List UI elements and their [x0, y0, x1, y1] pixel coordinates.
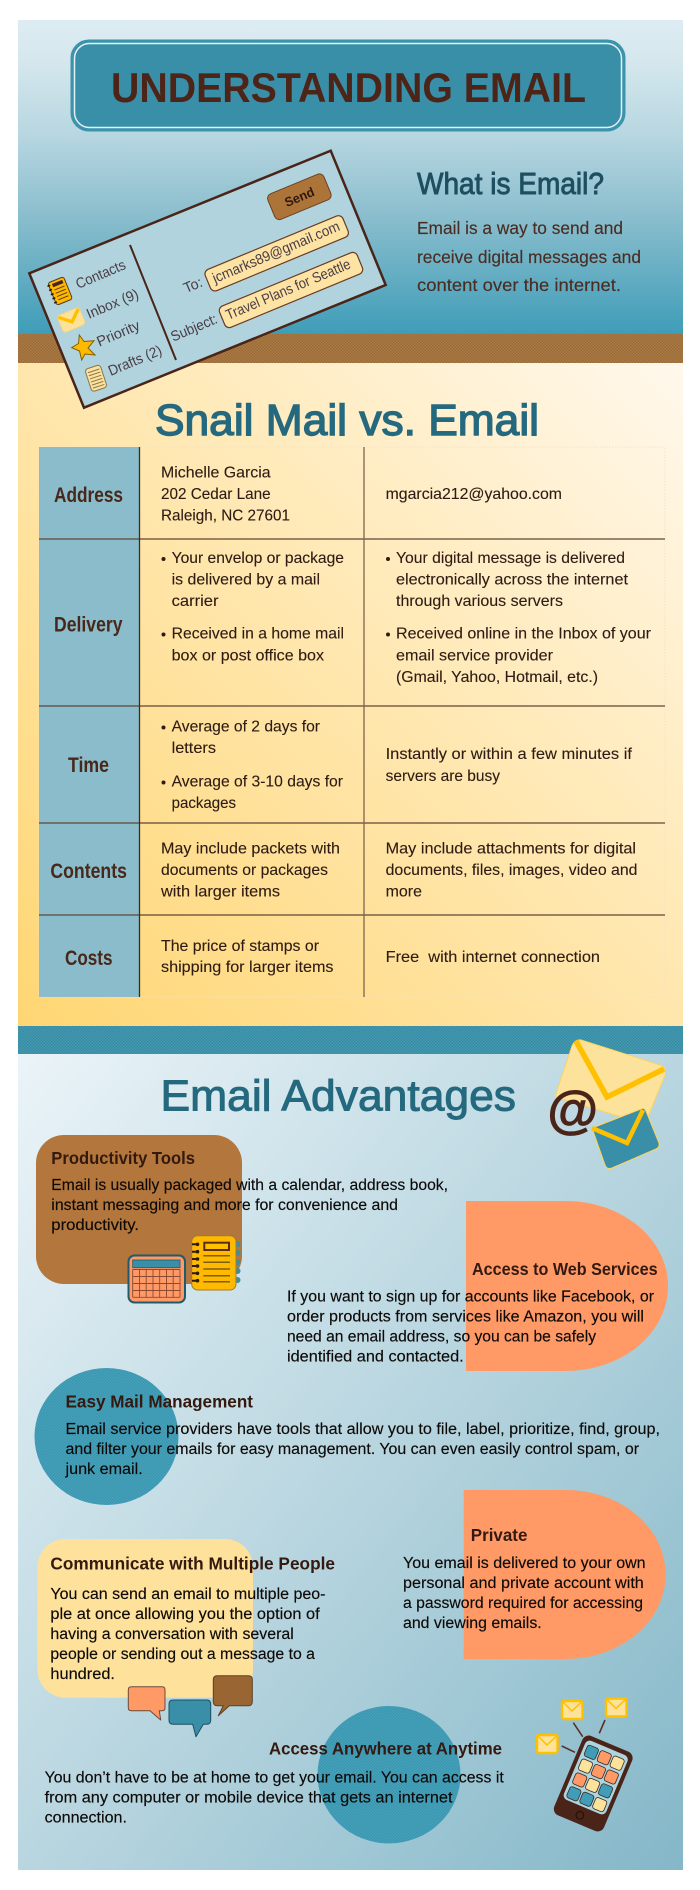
private block [403, 1490, 666, 1659]
communicate text: hundred. [50, 1666, 115, 1683]
row: address: Address [54, 484, 123, 507]
mail management text [64, 1421, 660, 1478]
comparison table [39, 447, 665, 997]
private text: personal and private account with [403, 1575, 644, 1592]
title banner [72, 41, 624, 130]
row: time [68, 719, 633, 812]
icon: notebook [192, 1236, 240, 1290]
row: costs: Costs [65, 947, 112, 970]
sidebar labels: Contacts [74, 257, 128, 293]
access to web services block [287, 1201, 668, 1371]
row: address: 202 Cedar Lane [161, 486, 271, 503]
panel: header background [18, 20, 683, 334]
panel: snail mail section background [18, 363, 683, 1026]
row: time: Time [68, 754, 109, 777]
access anywhere block [45, 1706, 504, 1843]
row: time: Instantly or within a few minutes if [386, 746, 633, 763]
teal textured band [18, 1026, 683, 1054]
row: delivery: email service provider [396, 648, 554, 664]
row: contents: documents or packages [161, 862, 328, 879]
send button [266, 172, 333, 221]
row: delivery: Received in a home mail [172, 626, 344, 643]
communicate heading: Communicate with Multiple People [50, 1554, 335, 1574]
web services heading: Access to Web Services [472, 1259, 658, 1279]
icon: speech bubbles [128, 1676, 252, 1737]
icon: calendar [128, 1256, 185, 1302]
communicate text: having a conversation with several [50, 1626, 294, 1643]
row: delivery: Your envelop or package [172, 550, 344, 567]
row: delivery: is delivered by a mail [172, 572, 320, 588]
row: delivery: Your digital message is delivered [396, 550, 625, 567]
row: costs [65, 938, 600, 976]
what is email description: Email is a way to send and [417, 218, 623, 238]
what is email description: receive digital messages and [417, 247, 641, 267]
web services text: need an email address, so you can be safely [287, 1329, 596, 1346]
what is email description: content over the internet. [417, 275, 621, 295]
web services text: identified and contacted. [287, 1349, 464, 1366]
email advantages heading: Email Advantages [160, 1072, 516, 1121]
communicate text: You can send an email to multiple peo- [50, 1586, 326, 1603]
row: costs: Free with internet connection [386, 949, 600, 966]
sidebar labels: Priority [95, 318, 143, 350]
private text [403, 1555, 646, 1632]
productivity text [51, 1177, 448, 1234]
row: contents: May include attachments for digital [386, 840, 636, 858]
row: delivery: through various servers [396, 593, 563, 610]
what is email description [417, 218, 641, 295]
access anywhere text: from any computer or mobile device that gets an internet [45, 1790, 453, 1807]
row: delivery: (Gmail, Yahoo, Hotmail, etc.) [396, 669, 598, 686]
row: contents: documents, files, images, video and [386, 862, 638, 879]
snail mail heading: Snail Mail vs. Email [155, 396, 539, 445]
access anywhere heading: Access Anywhere at Anytime [269, 1739, 502, 1759]
sidebar labels: Inbox (9) [84, 286, 141, 323]
row: contents: more [386, 884, 422, 900]
icon: priority star [72, 335, 95, 360]
web services text: order products from services like Amazon, you will [287, 1309, 644, 1326]
communicate with multiple people block [37, 1539, 335, 1737]
row: delivery: Received online in the Inbox of your [396, 626, 652, 643]
web services text: If you want to sign up for accounts like Facebook, or [287, 1289, 654, 1306]
row: address: Raleigh, NC 27601 [161, 508, 290, 524]
icon: inbox envelope [57, 307, 86, 333]
row: time: letters [172, 740, 216, 757]
row: delivery: electronically across the internet [396, 572, 629, 588]
row: delivery: box or post office box [172, 648, 324, 664]
productivity heading: Productivity Tools [51, 1148, 195, 1168]
mail management text: junk email. [64, 1461, 143, 1478]
private text: You email is delivered to your own [403, 1555, 646, 1572]
row: contents: May include packets with [161, 840, 340, 858]
access anywhere text [45, 1770, 504, 1827]
communicate text: ple at once allowing you the option of [50, 1606, 320, 1623]
productivity text: productivity. [51, 1217, 139, 1234]
private text: and viewing emails. [403, 1615, 542, 1632]
brown textured band [18, 334, 683, 363]
row: address [54, 464, 562, 524]
subject field: Subject: [169, 312, 220, 345]
row: contents: with larger items [160, 884, 280, 900]
what is email heading: What is Email? [417, 166, 604, 201]
icon: envelopes and at sign [547, 1040, 665, 1169]
sidebar labels: Drafts (2) [106, 343, 164, 380]
row: contents [50, 840, 637, 900]
icon: envelopes and at sign: @ [547, 1082, 598, 1140]
subject field [169, 251, 364, 345]
title: UNDERSTANDING EMAIL [111, 64, 586, 111]
easy mail management block [34, 1368, 660, 1505]
row: time: Average of 2 days for [172, 719, 321, 736]
productivity text: instant messaging and more for convenience and [51, 1197, 398, 1214]
row: costs: shipping for larger items [161, 959, 334, 976]
panel: advantages section background [18, 1054, 683, 1870]
icon: contacts notebook [46, 277, 72, 306]
email compose card illustration [29, 151, 386, 408]
mail management text: Email service providers have tools that allow you to file, label, prioritize, find, group, [66, 1421, 660, 1438]
send button: Send [282, 184, 317, 210]
mail management heading: Easy Mail Management [66, 1392, 253, 1412]
icon: smartphone with envelopes [537, 1698, 635, 1834]
access anywhere text: connection. [45, 1810, 127, 1827]
private heading: Private [471, 1525, 528, 1545]
row: delivery [54, 550, 652, 686]
to field: jcmarks89@gmail.com [209, 219, 342, 287]
access anywhere text: You don’t have to be at home to get your email. You can access it [45, 1770, 504, 1787]
icon: drafts note [85, 365, 107, 392]
sidebar labels [74, 257, 164, 380]
communicate text [50, 1586, 326, 1683]
row: address: mgarcia212@yahoo.com [386, 486, 562, 503]
row: address: Michelle Garcia [161, 464, 271, 481]
row: time: packages [172, 795, 236, 812]
row: contents: Contents [50, 860, 127, 883]
row: delivery: Delivery [54, 614, 123, 637]
subject field: Travel Plans for Seattle [224, 257, 353, 324]
communicate text: people or sending out a message to a [50, 1646, 315, 1663]
row: costs: The price of stamps or [161, 938, 320, 955]
mail management text: and filter your emails for easy management. You can even easily control spam, or [66, 1441, 639, 1458]
web services text [287, 1289, 654, 1366]
productivity text: Email is usually packaged with a calendar, address book, [51, 1177, 448, 1194]
row: time: Average of 3-10 days for [172, 774, 344, 790]
to field: To: [181, 275, 205, 297]
row: delivery: carrier [172, 593, 219, 610]
private text: a password required for accessing [403, 1595, 643, 1612]
row: time: servers are busy [386, 768, 500, 785]
productivity tools block [36, 1135, 448, 1302]
